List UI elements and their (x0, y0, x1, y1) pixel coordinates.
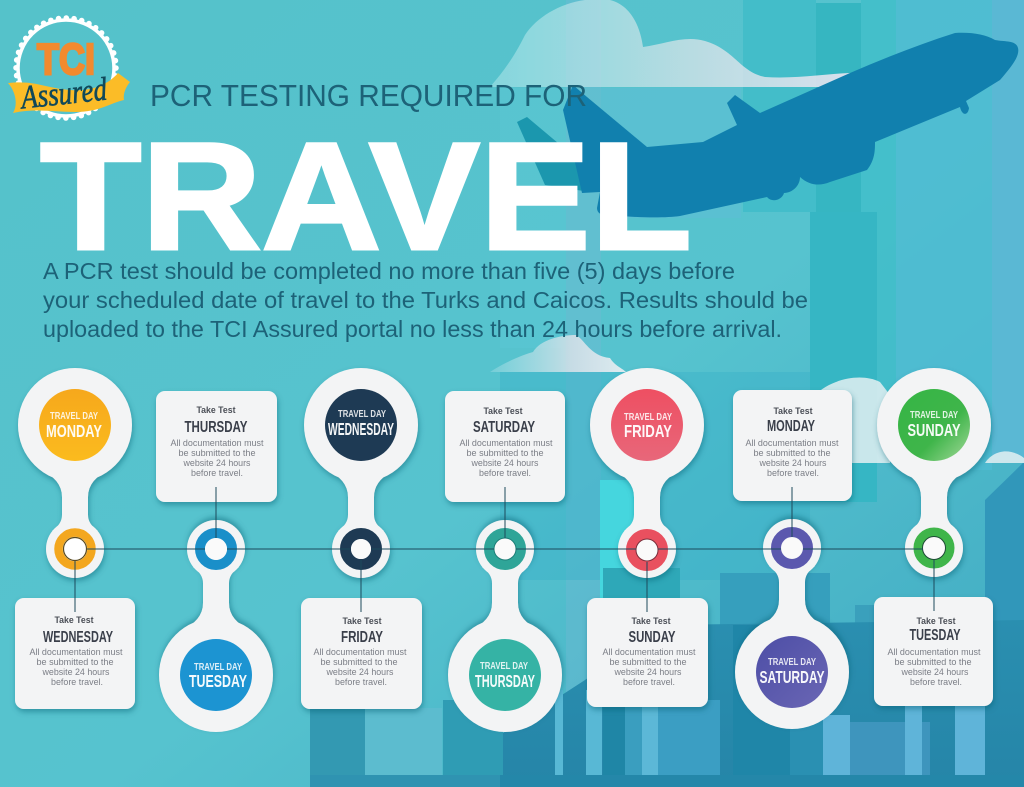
Tuesday label: TRAVEL DAY (194, 662, 242, 673)
pin: Saturday (735, 519, 849, 729)
Friday label: FRIDAY (624, 421, 672, 441)
Thursday label: THURSDAY (475, 671, 535, 691)
pin: Tuesday (159, 520, 273, 732)
card: Tuesday: Take Test (916, 616, 956, 626)
Thursday ring (489, 533, 521, 565)
pin: Friday (590, 368, 704, 578)
card: Wednesday: website 24 hours (42, 667, 110, 677)
cloud: middle (490, 335, 626, 372)
Tuesday node (205, 538, 227, 560)
Wednesday ring (346, 534, 376, 564)
pin: Thursday (448, 520, 562, 732)
cloud: top (490, 0, 873, 87)
Saturday label: TRAVEL DAY (768, 657, 816, 668)
card: Wednesday: WEDNESDAY (43, 629, 113, 646)
pin: Monday (18, 368, 132, 578)
Saturday label: SATURDAY (760, 667, 825, 687)
Sunday label: SUNDAY (908, 420, 961, 440)
Thursday node (494, 538, 516, 560)
card: Wednesday (15, 598, 135, 709)
Monday label: TRAVEL DAY (50, 411, 98, 422)
card: Saturday: before travel. (479, 468, 531, 478)
Friday label: TRAVEL DAY (624, 412, 672, 423)
card: Saturday: website 24 hours (471, 458, 539, 468)
pin: Sunday (877, 368, 991, 577)
card: Friday (301, 598, 422, 709)
card: Wednesday: All documentation must (30, 647, 123, 657)
card: Friday: FRIDAY (341, 629, 383, 646)
title: TRAVEL (40, 111, 692, 282)
Wednesday colour disc (325, 389, 397, 461)
Sunday ring (918, 532, 950, 564)
card: Sunday: All documentation must (602, 647, 696, 657)
Saturday label (760, 657, 825, 687)
Saturday ring (776, 532, 808, 564)
card: Friday: website 24 hours (326, 667, 394, 677)
card: Monday: Take Test (774, 406, 812, 416)
card: Wednesday: be submitted to the (36, 657, 114, 667)
card: Tuesday: website 24 hours (901, 667, 969, 677)
card: Thursday: Take Test (196, 405, 236, 415)
Wednesday label: WEDNESDAY (328, 419, 394, 439)
card: Monday: MONDAY (767, 418, 815, 435)
card: Sunday: website 24 hours (614, 667, 682, 677)
card: Monday (733, 390, 852, 501)
cloud: right (815, 378, 1024, 463)
Sunday label: TRAVEL DAY (910, 410, 958, 421)
card: Friday: be submitted to the (320, 657, 398, 667)
card: Monday: All documentation must (746, 438, 839, 448)
Monday colour disc (39, 389, 111, 461)
logo: TCI Assured badge (8, 18, 130, 118)
intro paragraph: uploaded to the TCI Assured portal no less than 24 hours before arrival. (43, 316, 782, 342)
Monday ring (58, 532, 92, 566)
card: Monday: be submitted to the (754, 448, 830, 458)
Saturday colour disc (756, 636, 828, 708)
subtitle: PCR TESTING REQUIRED FOR (150, 78, 587, 113)
card: Saturday: All documentation must (460, 438, 553, 448)
Tuesday label (189, 662, 247, 691)
card: Friday: All documentation must (314, 647, 407, 657)
Saturday node (782, 538, 802, 558)
Monday label (46, 411, 102, 441)
plane tail stabiliser (517, 117, 590, 192)
Thursday label: TRAVEL DAY (480, 661, 528, 672)
Friday ring (631, 534, 663, 566)
Wednesday node (351, 539, 371, 559)
card: Sunday: Take Test (632, 616, 670, 626)
intro paragraph (43, 258, 808, 342)
card: Thursday: All documentation must (170, 438, 264, 448)
Thursday label (475, 661, 535, 691)
card: Sunday: SUNDAY (628, 629, 676, 646)
pin: Wednesday (304, 368, 418, 578)
card: Tuesday: All documentation must (888, 647, 981, 657)
Wednesday label: TRAVEL DAY (338, 409, 386, 420)
card: Monday: before travel. (767, 468, 819, 478)
card: Wednesday: before travel. (51, 677, 103, 687)
card: Wednesday: Take Test (54, 615, 94, 625)
card: Thursday: be submitted to the (178, 448, 256, 458)
intro paragraph: your scheduled date of travel to the Turks and Caicos. Results should be (43, 287, 808, 313)
card: Sunday: before travel. (623, 677, 675, 687)
badge TCI letters: TCI (37, 35, 95, 84)
Monday node (64, 538, 86, 560)
Tuesday colour disc (180, 639, 252, 711)
Sunday node (922, 536, 946, 560)
badge scalloped ring (16, 18, 116, 118)
card: Tuesday: before travel. (910, 677, 962, 687)
card: Tuesday (874, 597, 993, 706)
card: Tuesday: be submitted to the (894, 657, 972, 667)
card: Monday: website 24 hours (759, 458, 827, 468)
Monday label: MONDAY (46, 421, 102, 441)
Tuesday label: TUESDAY (189, 671, 247, 691)
card: Tuesday: TUESDAY (910, 627, 961, 644)
Friday label (624, 412, 672, 441)
card: Sunday (587, 598, 708, 707)
Friday colour disc (611, 389, 683, 461)
badge Assured script: Assured (18, 72, 109, 117)
plane body (563, 33, 1018, 217)
timeline connector lines (75, 487, 934, 612)
card: Sunday: be submitted to the (610, 657, 686, 667)
card: Thursday: THURSDAY (184, 419, 248, 436)
card: Saturday (445, 391, 565, 502)
Sunday label (908, 410, 961, 440)
card: Saturday: Take Test (484, 406, 522, 416)
icon: airplane silhouette (517, 33, 1018, 217)
card: Saturday: be submitted to the (466, 448, 544, 458)
badge yellow ribbon (8, 73, 130, 113)
city skyline background (310, 0, 1024, 787)
Friday node (636, 539, 658, 561)
card: Thursday (156, 391, 277, 502)
card: Saturday: SATURDAY (473, 419, 535, 436)
intro paragraph: A PCR test should be completed no more than five (5) days before (43, 258, 735, 284)
card: Thursday: before travel. (191, 468, 243, 478)
card: Thursday: website 24 hours (183, 458, 251, 468)
card: Friday: before travel. (335, 677, 387, 687)
Sunday colour disc (898, 389, 970, 461)
card: Friday: Take Test (342, 616, 382, 626)
Thursday colour disc (469, 639, 541, 711)
Tuesday ring (200, 533, 232, 565)
Wednesday label (328, 409, 394, 439)
